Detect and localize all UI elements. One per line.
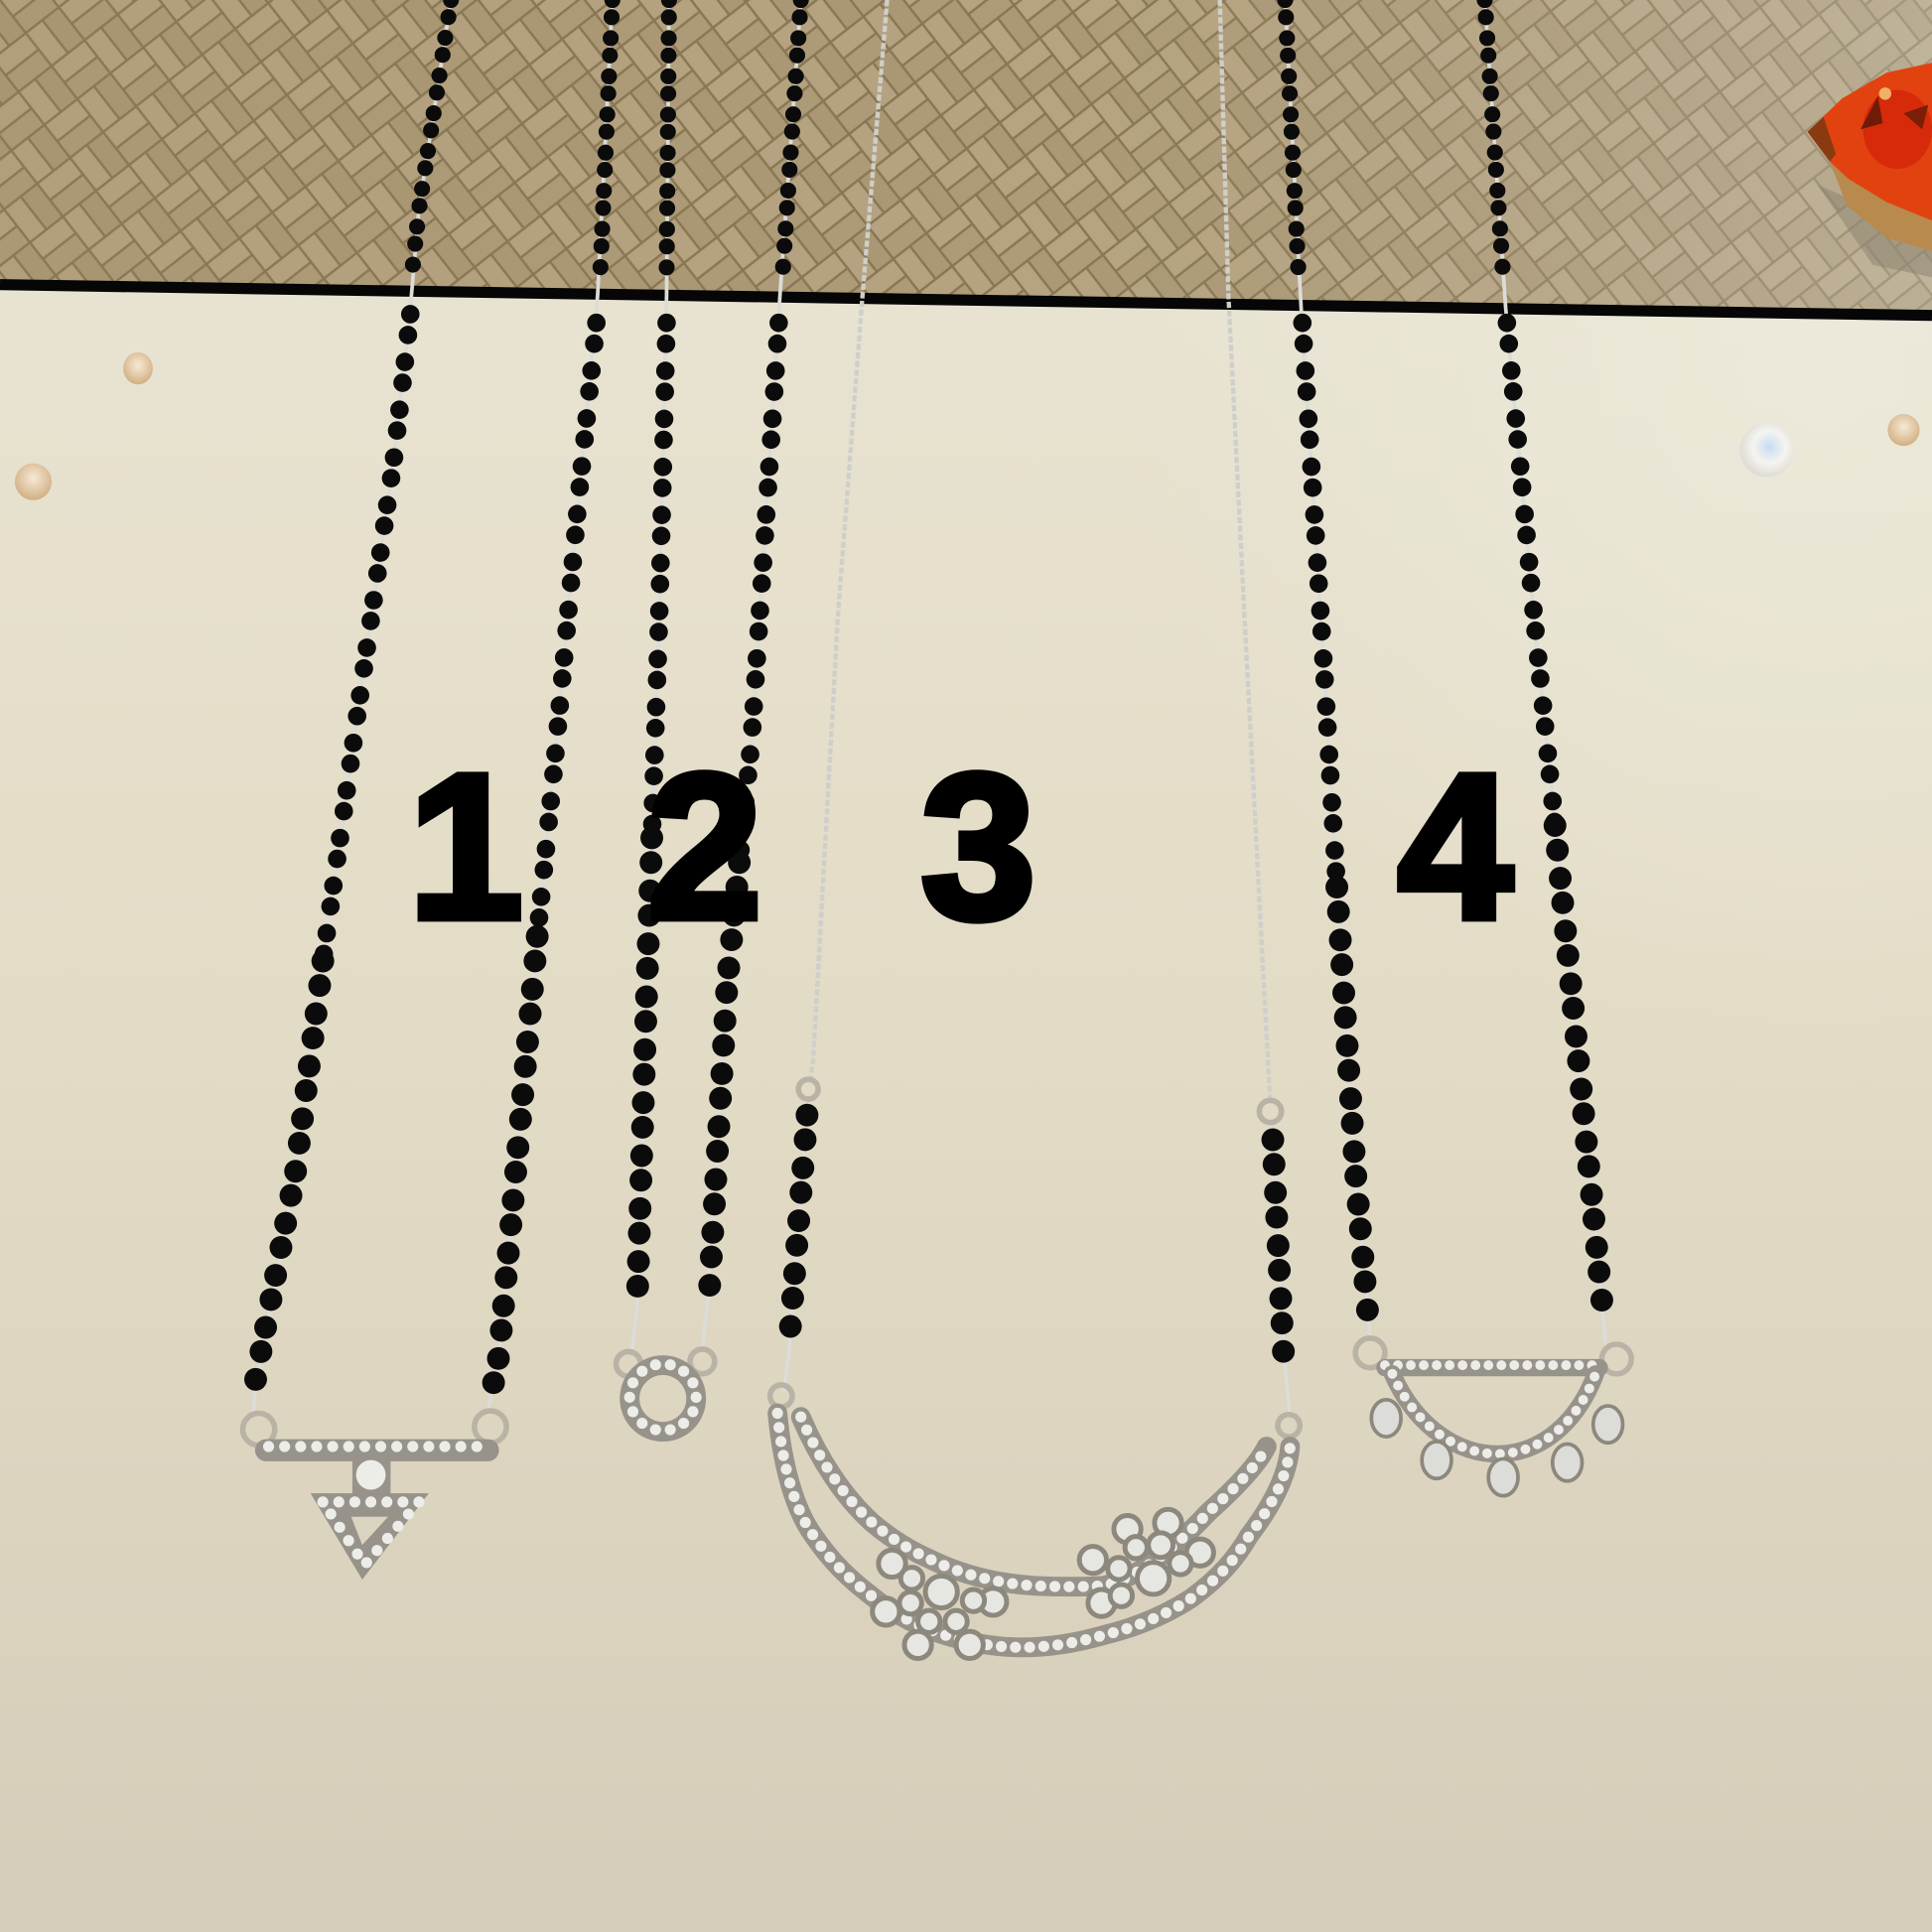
necklace 4 xyxy=(1285,0,1631,1496)
necklace 2 xyxy=(617,0,801,1432)
black mat edge line xyxy=(0,285,1932,316)
number 4: 4 xyxy=(1398,732,1513,963)
pendant: circle xyxy=(617,1349,715,1432)
flower left xyxy=(873,1550,1007,1658)
necklace 1 xyxy=(242,0,613,1580)
woven tan mat xyxy=(0,0,1932,316)
decorative pearl xyxy=(1739,423,1794,477)
decorative bead: far left xyxy=(15,464,52,500)
decorative bead: far right xyxy=(1887,414,1920,446)
necklace 3 xyxy=(770,0,1300,1658)
number 2: 2 xyxy=(647,732,762,963)
pendant: double crescent with flowers xyxy=(770,1385,1300,1658)
number 1: 1 xyxy=(408,732,523,963)
hanging gem drops xyxy=(1371,1400,1622,1496)
decorative bead: top left xyxy=(123,352,153,384)
number 3: 3 xyxy=(920,732,1035,963)
icon: orange dish xyxy=(1808,63,1932,277)
flower right xyxy=(1079,1509,1213,1616)
pendant: half moon with drops xyxy=(1355,1338,1631,1496)
pendant: bar and triangle xyxy=(242,1411,506,1580)
